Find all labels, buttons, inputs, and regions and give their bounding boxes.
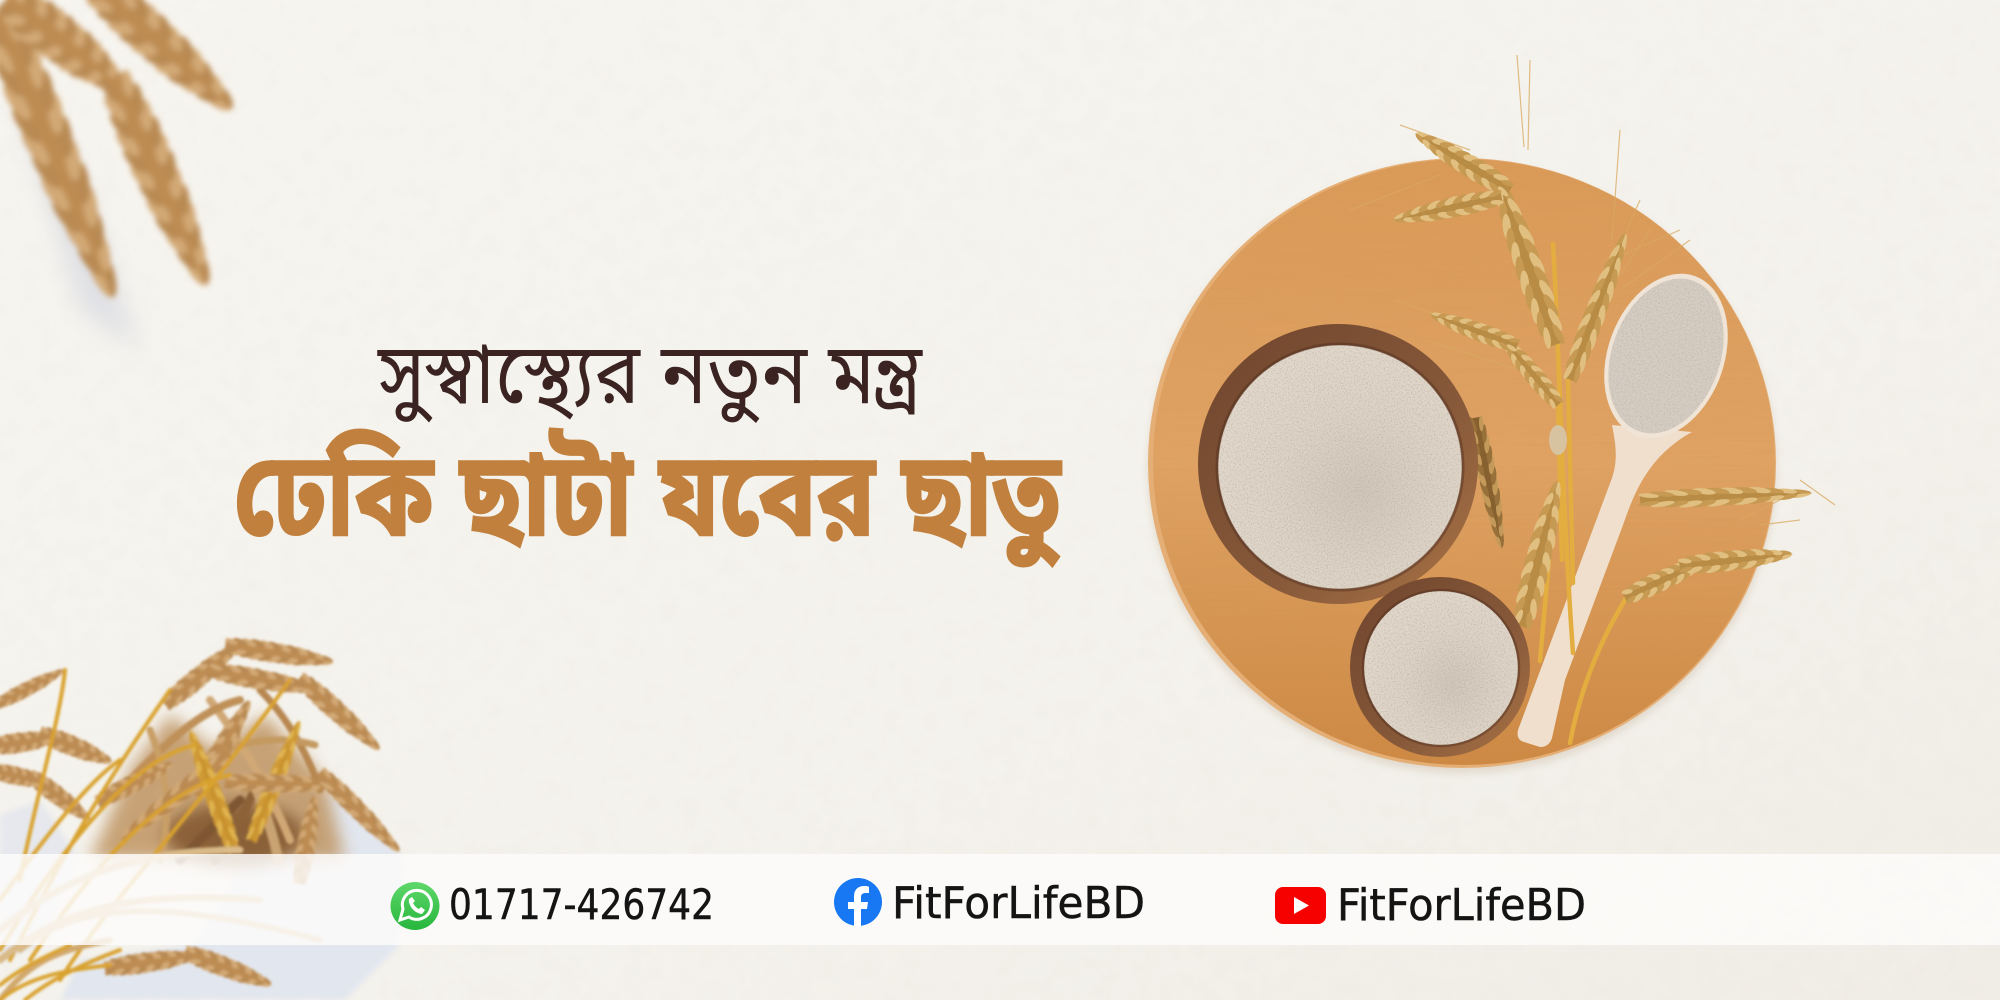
youtube handle: FitForLifeBD: [1337, 880, 1586, 931]
whatsapp contact: [390, 880, 714, 930]
wheat stalks: [1540, 244, 1628, 743]
facebook contact: [834, 878, 1145, 929]
blurred wheat bottom left: [0, 633, 408, 1000]
contact band: [0, 854, 2000, 945]
blurred wheat top left: [0, 0, 250, 350]
icon: whatsapp: [390, 882, 440, 930]
wheat ear left branch: [1391, 185, 1505, 232]
youtube contact: [1275, 880, 1586, 931]
title line 1: সুস্বাস্থ্যের নতুন মন্ত্র: [377, 327, 923, 424]
spoon flour: [1588, 262, 1744, 450]
wheat ear upper: [1408, 122, 1572, 352]
large wooden bowl of flour: [1198, 324, 1478, 604]
wheat bundle on board: [1350, 55, 1835, 743]
wheat ear right: [1558, 228, 1638, 386]
title line 2: ঢেকি ছাটা যবের ছাতু: [234, 429, 1062, 567]
wheat ear dark lower: [1465, 414, 1513, 551]
wheat ear lower centre: [1507, 476, 1573, 632]
wheat awns: [1350, 55, 1835, 525]
wheat ear middle: [1426, 304, 1568, 413]
wooden spoon: [1518, 256, 1750, 747]
twine knot: [1549, 425, 1567, 455]
facebook handle: FitForLifeBD: [892, 878, 1145, 929]
icon: youtube: [1275, 887, 1326, 924]
small wooden bowl of flour: [1350, 577, 1530, 757]
phone number: 01717-426742: [449, 880, 714, 929]
icon: facebook: [834, 878, 882, 926]
wheat ears right of spoon: [1619, 482, 1813, 609]
round wooden board: [1148, 158, 1776, 773]
